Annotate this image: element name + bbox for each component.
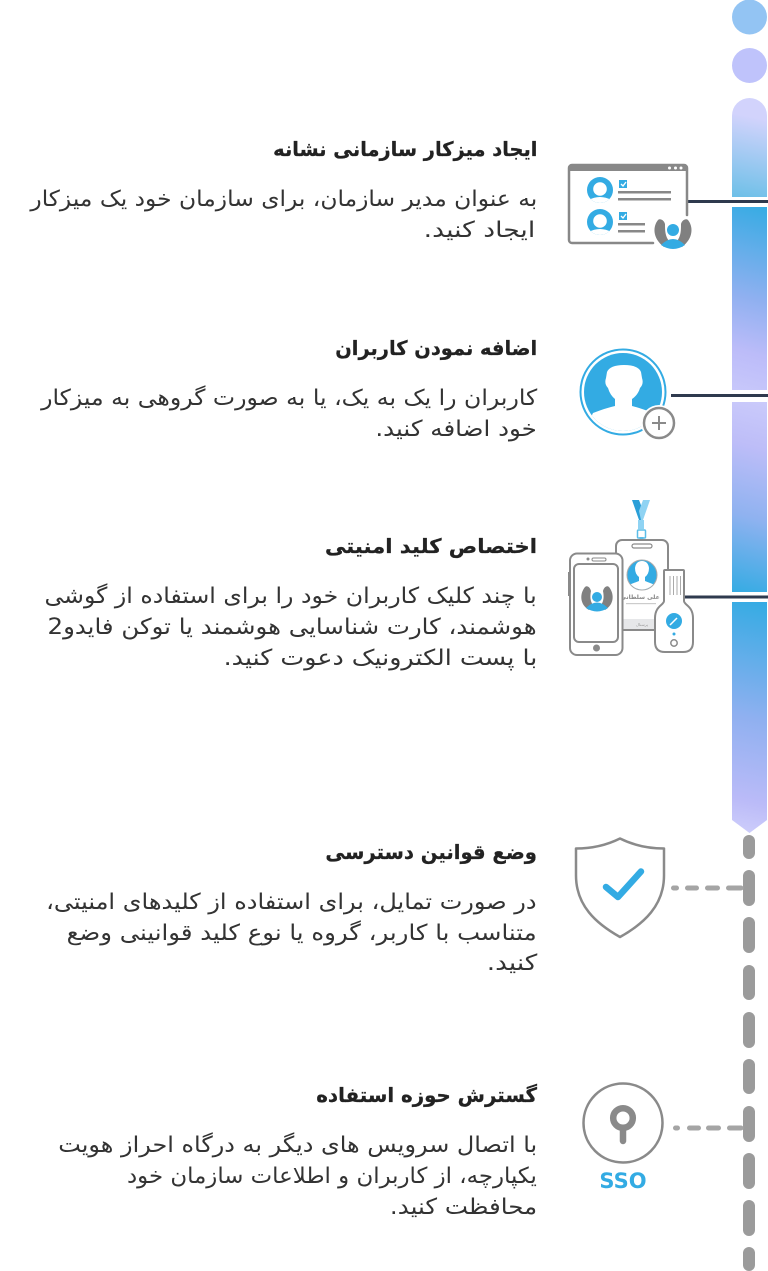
connector 3 <box>685 596 768 598</box>
step 3 line 2: هوشمند، کارت شناسایی هوشمند یا توکن فایدو2 <box>48 615 537 640</box>
step 4 line 3: کنید. <box>486 951 537 976</box>
id card: پرسنال <box>636 622 648 627</box>
icon: SSO <box>584 1084 662 1193</box>
step 4 line 1: در صورت تمایل، برای استفاده از کلیدهای امنیتی، <box>47 890 537 915</box>
step 3 line 3: با پست الکترونیک دعوت کنید. <box>223 646 537 671</box>
step 1 line 1: به عنوان مدیر سازمان، برای سازمان خود یک میزکار <box>30 187 537 212</box>
step 2 line 1: کاربران را یک به یک، یا به صورت گروهی به میزکار <box>41 386 537 411</box>
step 4 text <box>47 840 538 976</box>
step 3 heading: اختصاص کلید امنیتی <box>325 534 537 558</box>
step 2 text <box>40 336 538 442</box>
timeline top circle <box>732 0 767 34</box>
step 5 line 1: با اتصال سرویس های دیگر به درگاه احراز هویت <box>58 1133 537 1158</box>
id card <box>616 540 668 630</box>
timeline and icons <box>568 0 768 1271</box>
timeline segment 1 <box>732 98 767 197</box>
timeline segment 3 <box>732 402 767 592</box>
icon: security keys <box>568 500 693 655</box>
dashed connector 4 <box>674 886 741 890</box>
dashed connector 5 <box>676 1126 741 1130</box>
phone <box>568 554 622 655</box>
step 4 heading: وضع قوانین دسترسی <box>325 840 537 864</box>
id card: علی سلطانی <box>620 594 660 601</box>
connector 2 <box>671 394 768 397</box>
lanyard <box>632 500 650 545</box>
fido token <box>655 570 693 652</box>
step 2 heading: اضافه نمودن کاربران <box>335 336 537 360</box>
icon: dashboard window <box>569 165 692 249</box>
step 4 line 2: متناسب با کاربر، گروه یا نوع کلید قوانینی وضع <box>67 921 537 946</box>
step 1 text <box>29 137 537 243</box>
icon: shield <box>576 838 664 937</box>
timeline segment 2 <box>732 207 767 390</box>
SSO label: SSO <box>599 1169 647 1193</box>
step 2 line 2: خود اضافه کنید. <box>375 417 537 442</box>
step 5 text <box>58 1083 538 1220</box>
step 1 heading: ایجاد میزکار سازمانی نشانه <box>273 137 537 161</box>
step 3 line 1: با چند کلیک کاربران خود را برای استفاده از گوشی <box>45 584 537 609</box>
step 1 line 2: ایجاد کنید. <box>423 218 535 243</box>
icon: user add <box>580 350 677 441</box>
step 5 line 3: محافظت کنید. <box>390 1195 537 1220</box>
step 5 heading: گسترش حوزه استفاده <box>316 1083 537 1107</box>
dashed timeline <box>743 835 755 1271</box>
timeline segment 4 arrow <box>732 602 767 833</box>
step 3 text <box>45 534 537 671</box>
connector 1 <box>688 200 768 203</box>
step 5 line 2: یکپارچه، از کاربران و اطلاعات سازمان خود <box>127 1164 537 1189</box>
timeline second circle <box>732 48 767 83</box>
